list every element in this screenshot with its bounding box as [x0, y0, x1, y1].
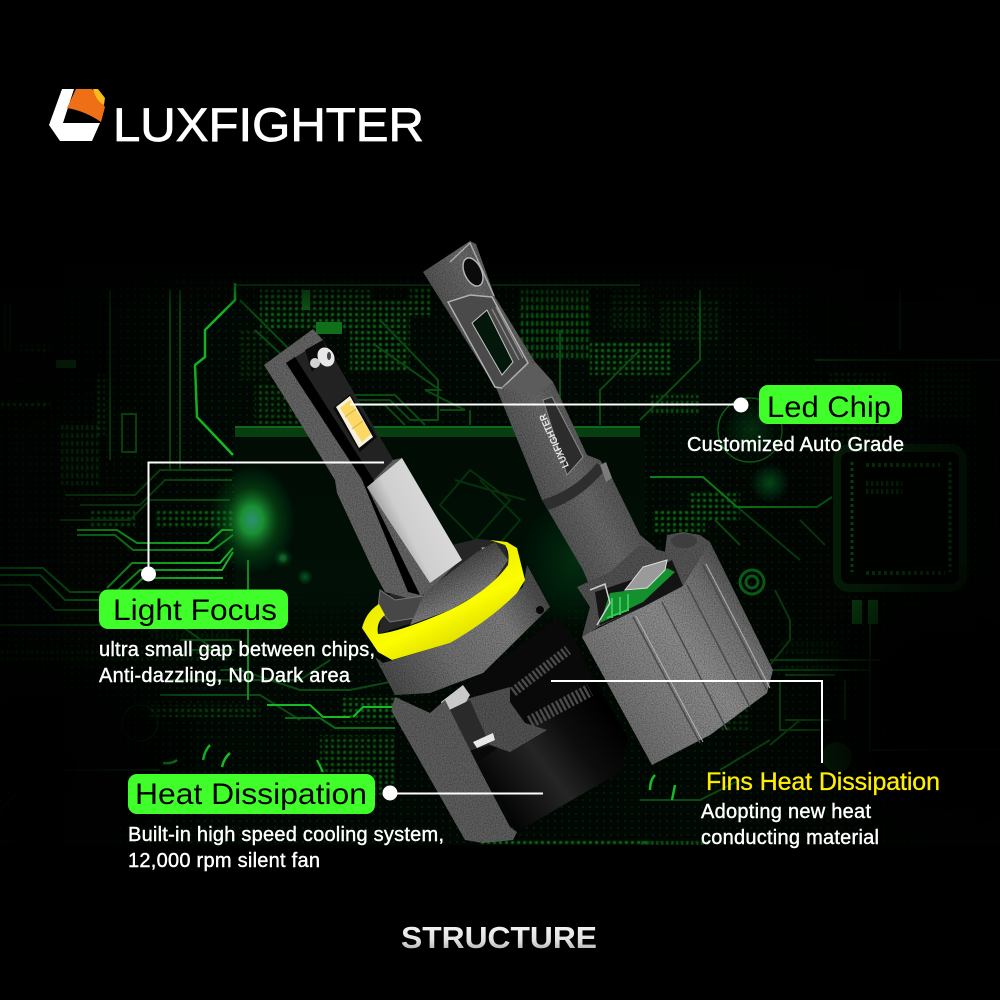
board wash: [0, 262, 1000, 845]
product: rear LED bulb: [423, 241, 773, 765]
lower gray housing: [392, 697, 517, 843]
pill heading: Heat Dissipation: [135, 778, 367, 811]
circuit rings: [5, 290, 878, 772]
callout: heat dissipation: [128, 774, 543, 872]
leader line: [148, 462, 384, 574]
leader line: [350, 404, 741, 406]
dot grids: [0, 285, 990, 845]
description: [99, 639, 375, 687]
product: front LED bulb: [264, 329, 628, 843]
leader line: [551, 681, 822, 763]
fine texture: [29, 282, 906, 843]
leader line: [390, 792, 543, 794]
pill heading: [99, 590, 288, 629]
description: 12,000 rpm silent fan: [128, 850, 320, 872]
callout: led chip: [350, 385, 904, 456]
rear bulb flange: [577, 545, 683, 637]
cup interior back: [378, 539, 510, 634]
yellow heading: Fins Heat Dissipation: [706, 768, 940, 796]
engraved brand text: LUXFIGHTER: [537, 411, 572, 469]
description: ultra small gap between chips,: [99, 639, 375, 661]
pill heading: Led Chip: [767, 391, 891, 424]
description: conducting material: [701, 827, 879, 849]
blurred glows: [212, 470, 292, 570]
logo: LUXFIGHTER: [49, 89, 424, 151]
black fin section: [441, 617, 628, 832]
description: Built-in high speed cooling system,: [128, 824, 444, 846]
mounting screw: [305, 340, 338, 372]
rear bulb cylinder: [582, 542, 773, 765]
hex nut: [378, 590, 428, 622]
dim traces: [0, 285, 1000, 810]
pill heading: Light Focus: [113, 594, 277, 627]
edge shading: [0, 290, 1000, 843]
marker dot: [382, 786, 398, 800]
upper gray ring: [375, 565, 550, 695]
led chip: [333, 394, 377, 452]
logo mark: [49, 89, 105, 141]
callout: light focus: [99, 462, 384, 687]
callout: fins heat dissipation: [551, 681, 940, 849]
description: [701, 801, 879, 849]
description: [128, 824, 444, 872]
rear bulb socket: [665, 532, 710, 590]
logo wordmark: LUXFIGHTER: [113, 98, 424, 151]
cup inner wall: [410, 542, 508, 625]
marker dot: [141, 566, 156, 582]
background: circuit board: [0, 281, 1000, 845]
description: Customized Auto Grade: [687, 434, 904, 456]
bright traces: [0, 283, 832, 800]
circuit band: [235, 426, 640, 437]
dim diamond motif: [440, 470, 525, 555]
chip: right: [837, 448, 963, 588]
silver heat bar: [367, 458, 462, 583]
description: Anti-dazzling, No Dark area: [99, 665, 351, 687]
front bulb stem: [264, 329, 460, 600]
rear bulb stem: [423, 241, 656, 592]
description: Adopting new heat: [701, 801, 871, 823]
yellow ring: [362, 540, 525, 660]
central dark green panel: [236, 442, 640, 598]
footer title: STRUCTURE: [401, 920, 597, 955]
marker dot: [734, 398, 748, 412]
